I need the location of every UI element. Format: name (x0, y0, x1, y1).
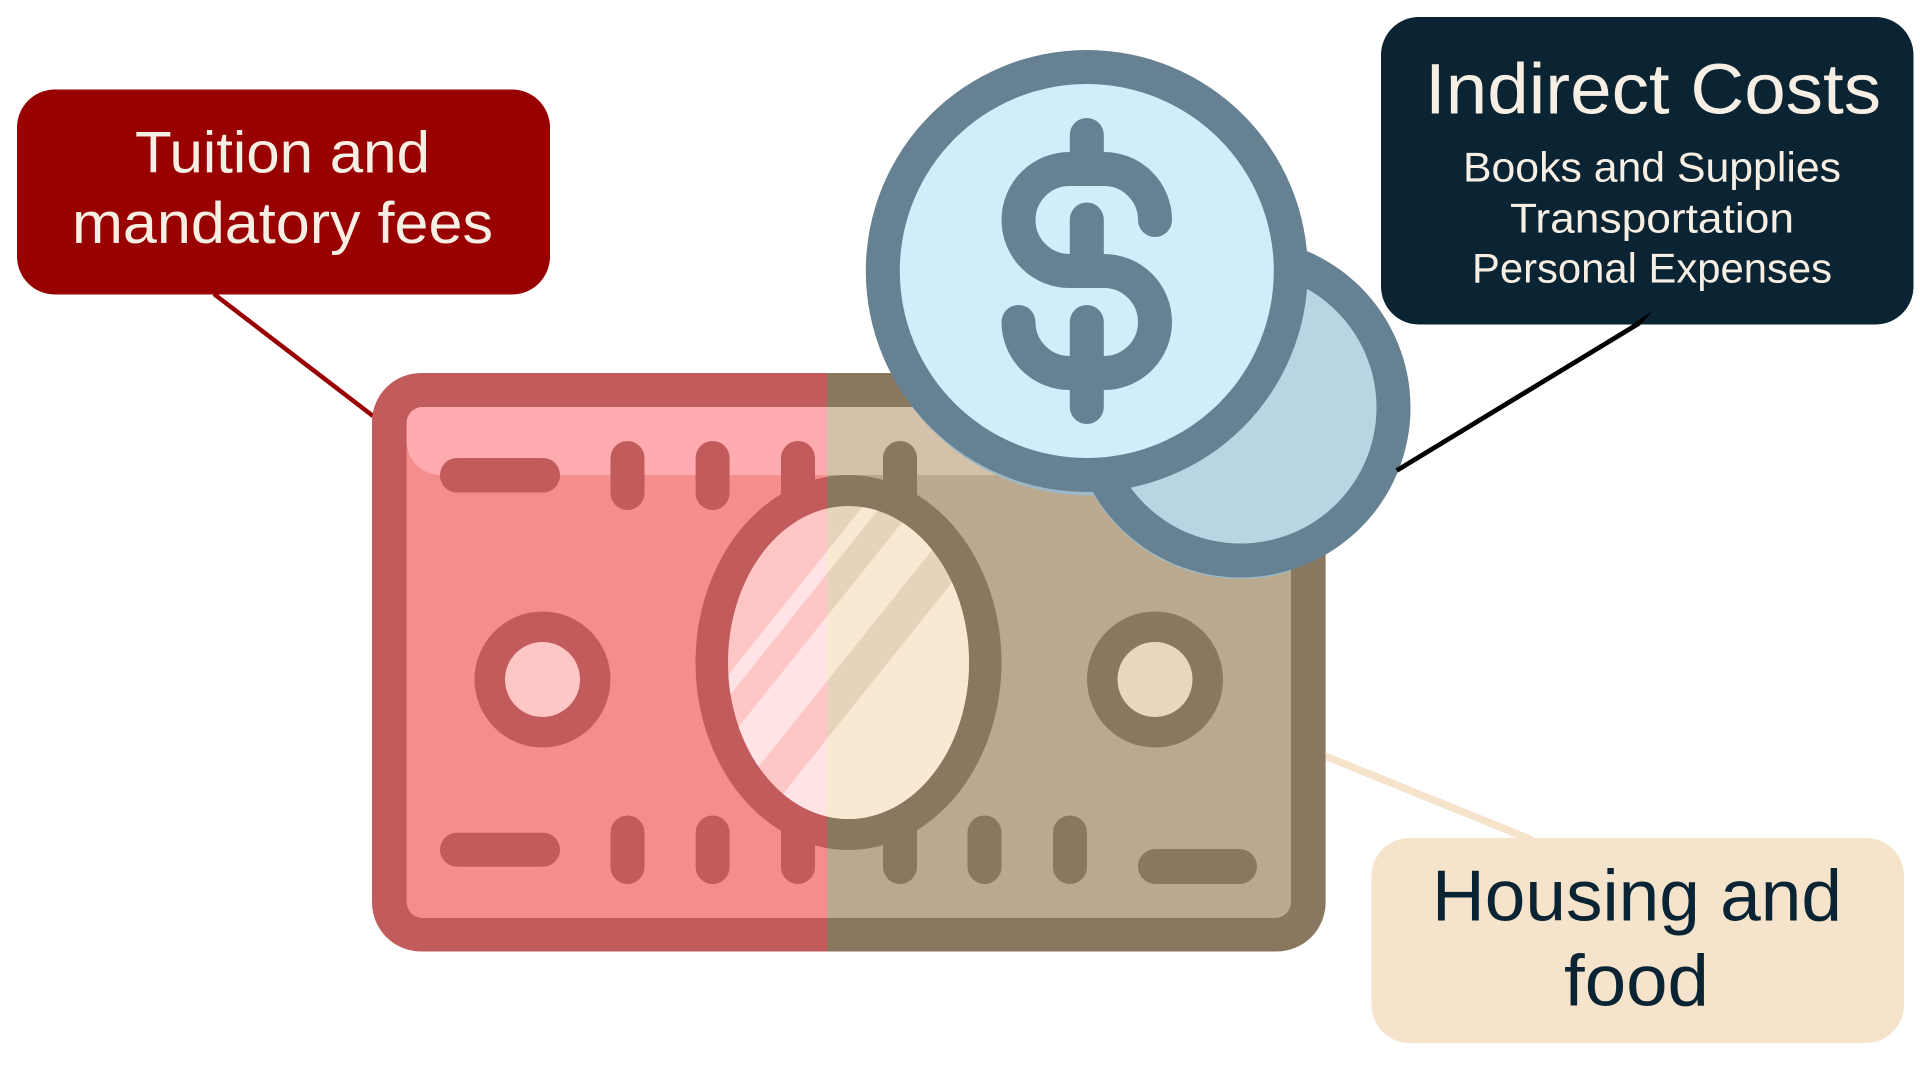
connector: tuition label to bill (214, 294, 373, 416)
label: tuition and mandatory fees: mandatory fees (72, 191, 493, 256)
list: indirect cost items (1463, 144, 1841, 291)
icon: dollar bill (372, 373, 1326, 952)
heading: indirect costs: Indirect Costs (1425, 50, 1881, 130)
label: housing and food: Housing and (1432, 856, 1842, 936)
bill left half: tuition share (372, 373, 827, 952)
label: tuition and mandatory fees: Tuition and (135, 120, 430, 186)
list: indirect cost items: Books and Supplies (1463, 144, 1841, 190)
list: indirect cost items: Personal Expenses (1472, 244, 1832, 291)
label: housing and food: food (1564, 942, 1709, 1022)
icon: back coin (1070, 238, 1410, 578)
icon: dollar sign (1018, 135, 1155, 407)
connector: indirect costs label to coins (1396, 311, 1653, 472)
icon: front coin with dollar sign (866, 50, 1308, 492)
label: tuition and mandatory fees (17, 90, 550, 294)
label: housing and food (1372, 838, 1904, 1043)
coin shadow on the bill (912, 407, 1291, 579)
label: indirect costs (1381, 17, 1914, 324)
bill right half: housing share (827, 373, 1326, 952)
connector: housing label to bill (1325, 756, 1532, 840)
list: indirect cost items: Transportation (1510, 194, 1794, 241)
